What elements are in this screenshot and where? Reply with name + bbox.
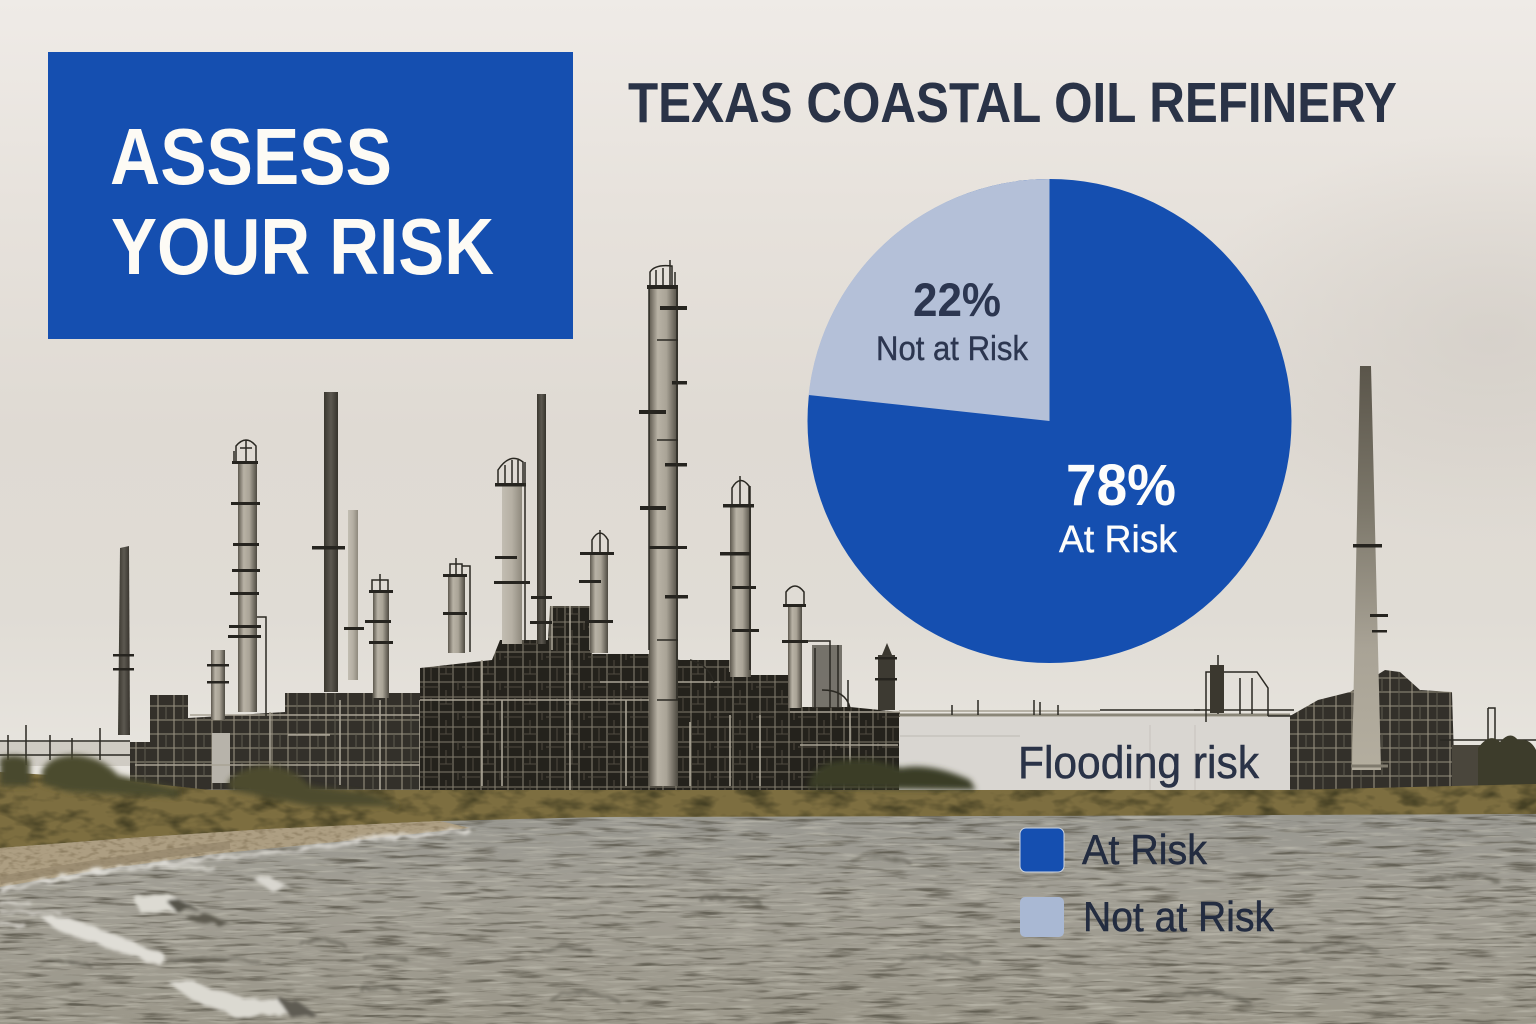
headline banner bbox=[48, 52, 573, 339]
shrubs bbox=[0, 755, 976, 806]
refinery lattice: central section bbox=[420, 606, 900, 792]
refinery lattice: right section bbox=[1290, 670, 1492, 792]
sandy beach bbox=[0, 821, 470, 887]
legend bbox=[1020, 826, 1275, 940]
banner heading: assess: ASSESS bbox=[110, 112, 392, 201]
tower: vessel with pipe bbox=[443, 558, 470, 653]
grass bank bbox=[0, 772, 1536, 848]
tower: small left vessel bbox=[207, 650, 229, 720]
tower: far short vessel bbox=[875, 643, 897, 710]
label: 78 percent: 78% bbox=[1066, 453, 1176, 518]
refinery lattice: above tank, right bbox=[1194, 655, 1310, 722]
tower: main tall column bbox=[639, 260, 688, 786]
tower: pale stack bbox=[344, 510, 364, 680]
tower: right-centre column bbox=[720, 476, 759, 677]
tower: slim stack bbox=[530, 394, 552, 644]
distant low buildings left bbox=[0, 725, 140, 766]
white storage tank bbox=[899, 700, 1290, 791]
refinery lattice: left section bbox=[130, 693, 445, 792]
legend swatch: at risk bbox=[1020, 828, 1064, 872]
tower: vessel with platforms bbox=[365, 574, 393, 698]
tower: right tall stack bbox=[1351, 366, 1388, 770]
label: not at risk: Not at Risk bbox=[876, 330, 1029, 368]
legend label: at risk: At Risk bbox=[1082, 826, 1208, 873]
tower: tall dark stack bbox=[312, 392, 345, 692]
pie chart bbox=[808, 179, 1292, 663]
legend label: not at risk: Not at Risk bbox=[1083, 893, 1275, 940]
tower: mid vessel bbox=[579, 530, 614, 653]
title: TEXAS COASTAL OIL REFINERY bbox=[628, 71, 1397, 135]
pie slice: not at risk bbox=[809, 179, 1050, 421]
water bbox=[0, 812, 1536, 1024]
banner heading: your risk: YOUR RISK bbox=[111, 202, 494, 291]
label: at risk: At Risk bbox=[1059, 519, 1178, 561]
tower: pale wide column bbox=[494, 458, 530, 644]
tower: left column bbox=[228, 440, 266, 716]
label: 22 percent: 22% bbox=[913, 273, 1001, 326]
flooding risk heading: Flooding risk bbox=[1018, 737, 1259, 788]
tower: thin flare stack bbox=[113, 546, 134, 735]
distant pole and trees right bbox=[1440, 708, 1536, 792]
legend swatch: not at risk bbox=[1020, 897, 1064, 937]
waves and foam bbox=[0, 830, 1500, 1018]
tower: short column with pipework bbox=[782, 586, 850, 708]
